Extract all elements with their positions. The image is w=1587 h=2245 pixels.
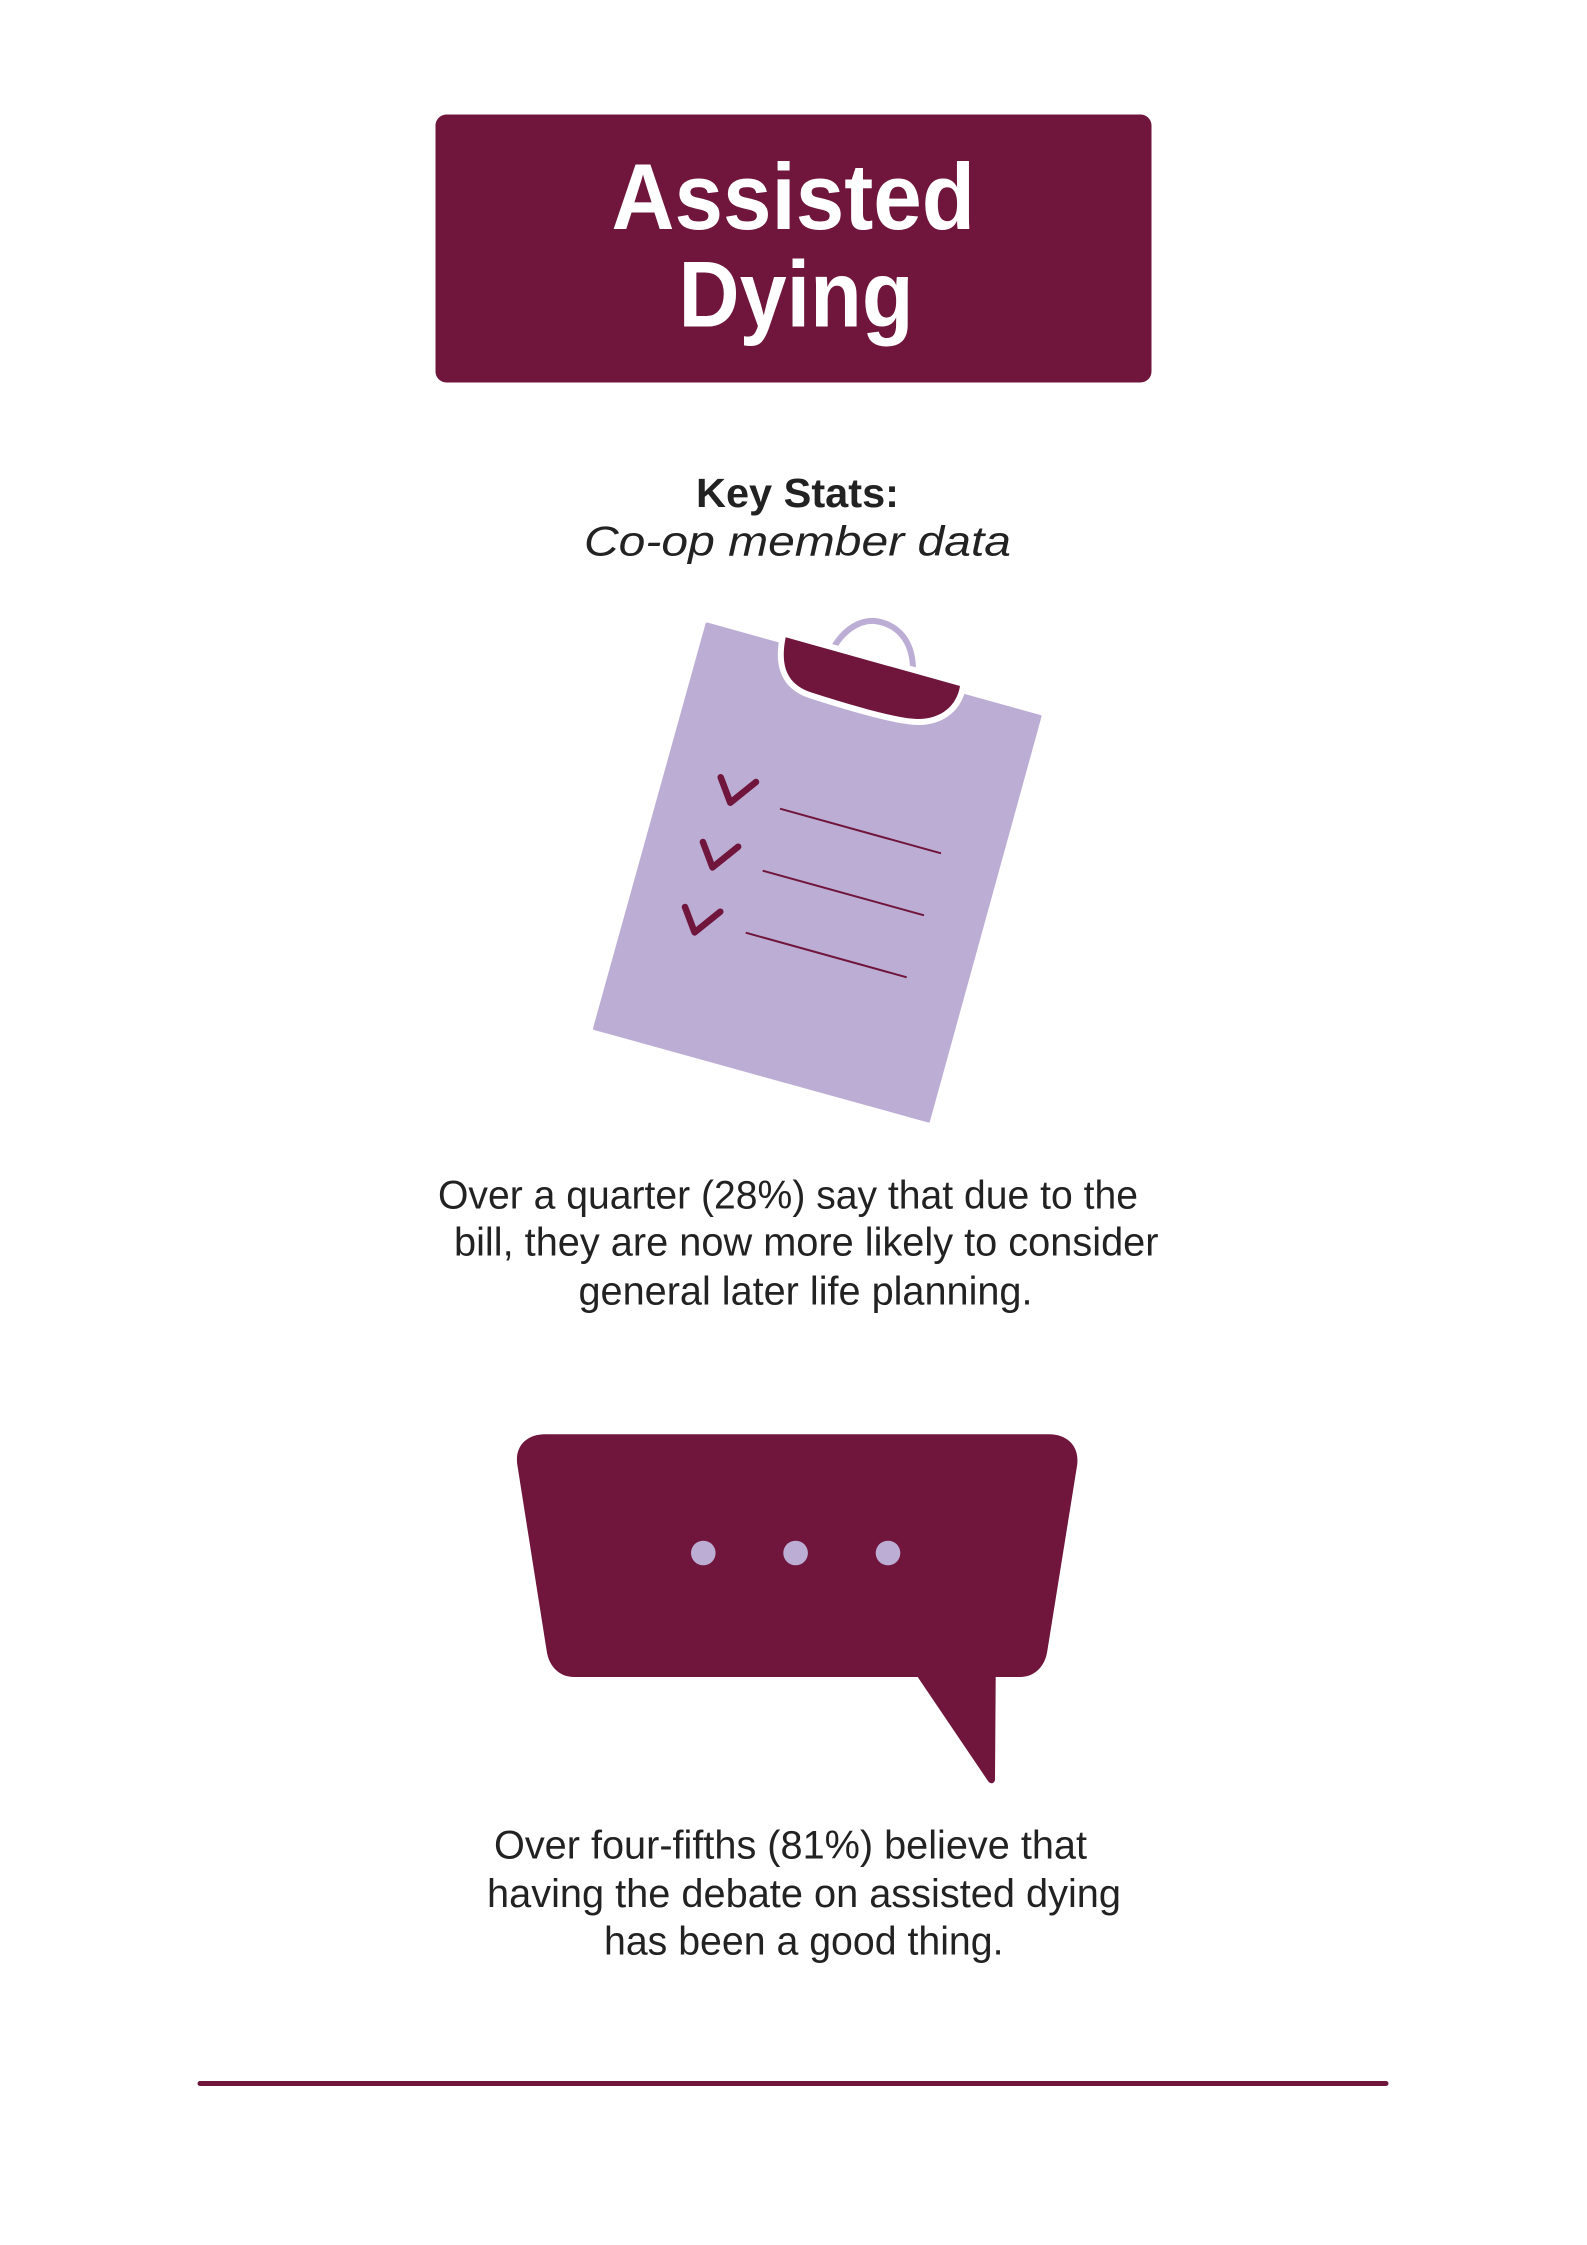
checklist lines bbox=[746, 809, 941, 977]
title banner bbox=[436, 114, 1152, 382]
subheading: key stats: Co-op member data bbox=[584, 518, 1011, 564]
text block: debate stat bbox=[487, 1824, 1121, 1964]
title text: Assisted bbox=[612, 144, 975, 249]
bubble body and tail bbox=[517, 1434, 1077, 1783]
icon: clipboard bbox=[594, 621, 1040, 1121]
bubble dots bbox=[691, 1541, 900, 1565]
clipboard board bbox=[594, 624, 1040, 1121]
text block: later life planning stat: Over a quarter (28%) say that due to the bbox=[438, 1174, 1138, 1218]
text block: later life planning stat bbox=[438, 1174, 1158, 1314]
clipboard handle bbox=[831, 621, 913, 670]
text block: debate stat: has been a good thing. bbox=[604, 1920, 1004, 1964]
subheading: key stats bbox=[584, 470, 1011, 564]
footer rule bbox=[198, 2081, 1388, 2086]
text block: later life planning stat: general later life planning. bbox=[578, 1270, 1032, 1314]
text block: debate stat: Over four-fifths (81%) believe that bbox=[494, 1824, 1087, 1868]
banner background bbox=[436, 114, 1152, 382]
checklist ticks bbox=[685, 777, 756, 932]
text block: debate stat: having the debate on assisted dying bbox=[487, 1872, 1121, 1916]
icon: speech bubble bbox=[517, 1434, 1077, 1783]
subheading: key stats: Key Stats: bbox=[696, 470, 899, 516]
clipboard clip bbox=[784, 637, 960, 719]
text block: later life planning stat: bill, they are now more likely to consider bbox=[454, 1221, 1158, 1265]
title text bbox=[612, 144, 975, 346]
title text: Dying bbox=[678, 242, 914, 346]
